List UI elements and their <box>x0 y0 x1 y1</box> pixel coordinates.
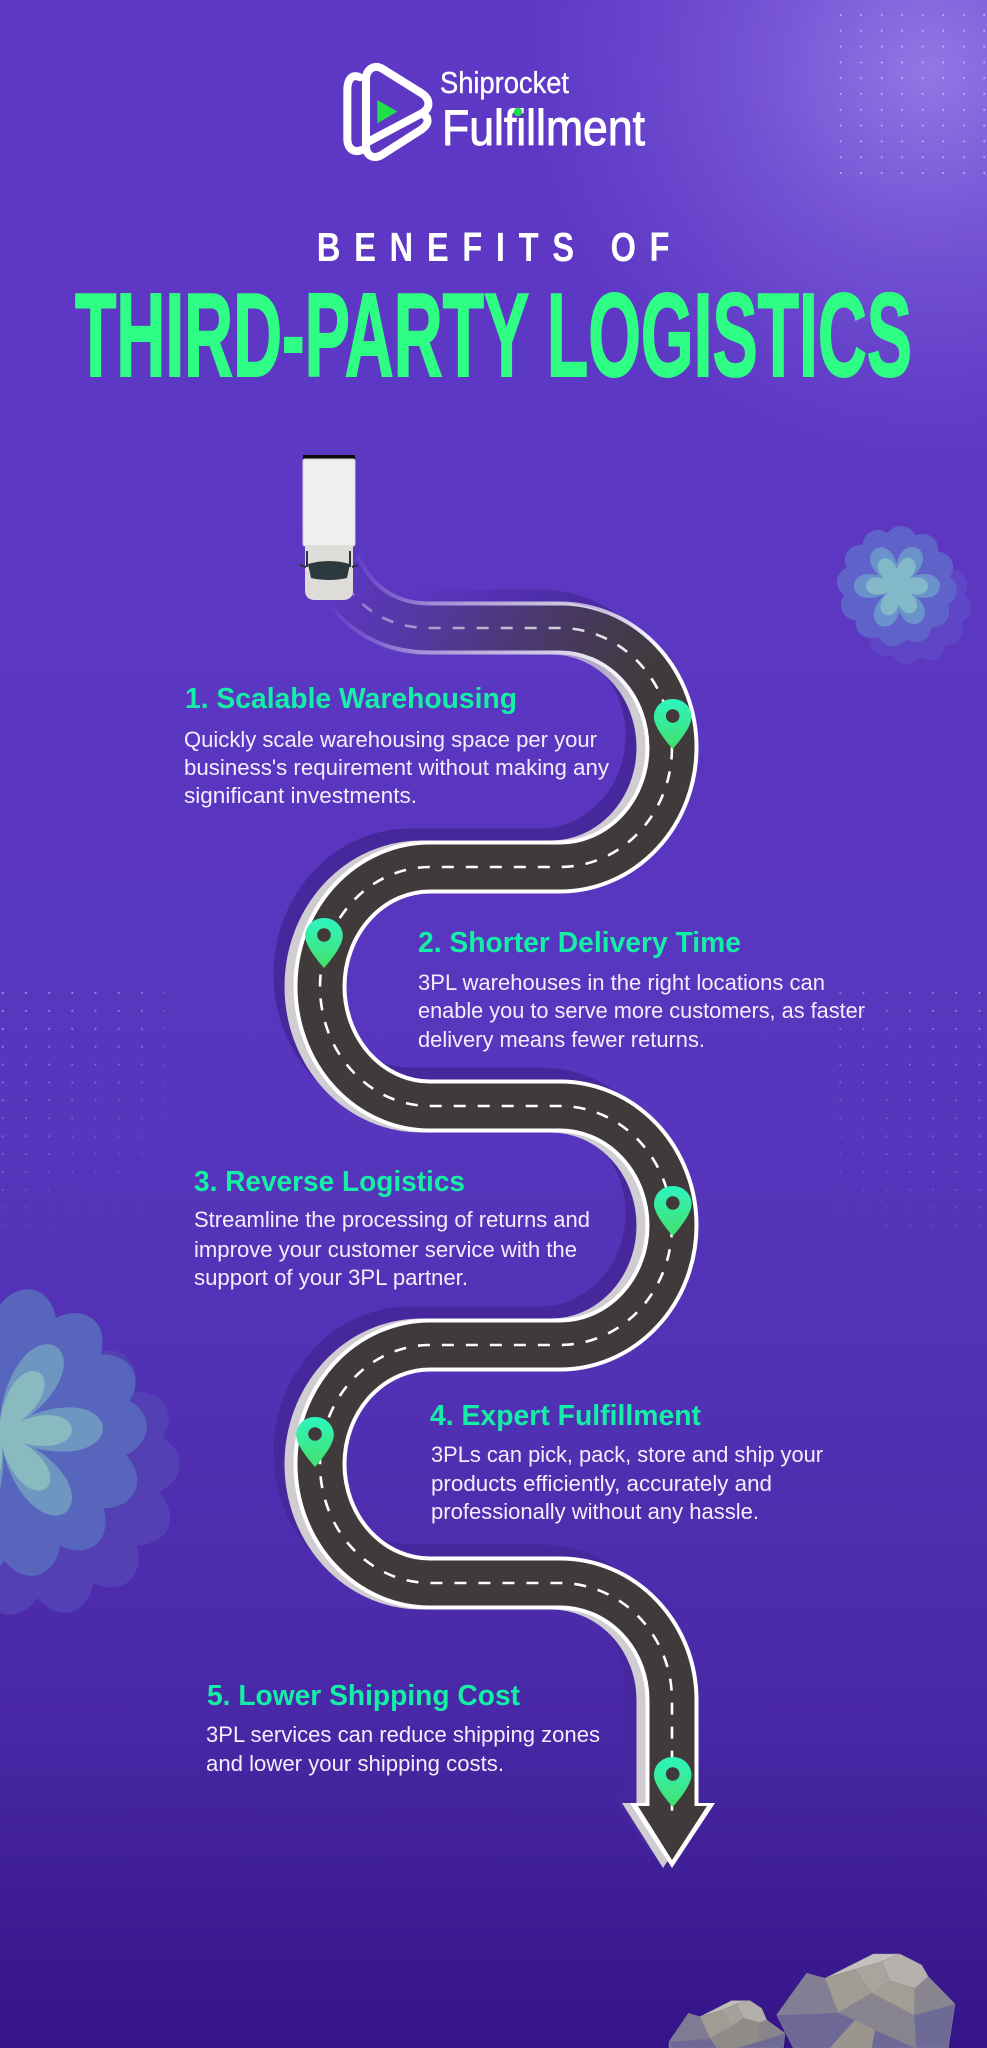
flower: left <box>0 1282 182 1621</box>
text block 2: 3PL warehouses in the right locations can <box>418 970 825 995</box>
text block 4: products efficiently, accurately and <box>431 1471 772 1496</box>
text block 2: 2. Shorter Delivery Time <box>418 927 741 959</box>
location pin 3 <box>654 1186 692 1236</box>
text block 3 <box>194 1166 590 1290</box>
location pin 4 <box>296 1417 334 1467</box>
title <box>75 223 912 402</box>
rock: small <box>669 2001 785 2048</box>
text block 4: 3PLs can pick, pack, store and ship your <box>431 1442 823 1467</box>
dot grid: left <box>0 990 165 1241</box>
road centre dashes <box>320 565 672 1815</box>
text block 4: 4. Expert Fulfillment <box>430 1400 701 1432</box>
location pin 1 <box>654 699 692 749</box>
text block 3: 3. Reverse Logistics <box>194 1166 465 1198</box>
road <box>300 553 715 1868</box>
truck <box>300 455 358 600</box>
text block 1 <box>184 683 610 808</box>
location pin 2 <box>305 918 343 968</box>
title line 1: BENEFITS OF <box>317 223 670 270</box>
rock: large <box>777 1954 955 2048</box>
logo wordmark: Shiprocket <box>440 65 569 100</box>
text block 1: Quickly scale warehousing space per your <box>184 727 597 752</box>
road shadow <box>300 553 695 1856</box>
location pin 5 <box>654 1757 692 1807</box>
text block 1: significant investments. <box>184 783 417 808</box>
text block 1: 1. Scalable Warehousing <box>185 683 517 715</box>
text block 5: and lower your shipping costs. <box>206 1751 504 1776</box>
rocks <box>669 1954 955 2048</box>
text block 2: enable you to serve more customers, as faster <box>418 998 865 1023</box>
road surface <box>320 565 707 1860</box>
logo wordmark: Fulfillment <box>442 100 645 156</box>
text block 3: Streamline the processing of returns and <box>194 1207 590 1232</box>
flower: top right <box>835 524 973 666</box>
text block 5: 5. Lower Shipping Cost <box>207 1680 520 1712</box>
text block 2 <box>418 927 865 1052</box>
road side wall <box>311 565 706 1868</box>
icon: play triangles <box>347 67 428 157</box>
dot grid: right <box>838 990 987 1230</box>
text block 4 <box>430 1400 823 1524</box>
logo <box>347 65 645 157</box>
text block 5 <box>206 1680 600 1776</box>
dot grid: top right <box>838 13 987 187</box>
text block 5: 3PL services can reduce shipping zones <box>206 1722 600 1747</box>
text block 3: improve your customer service with the <box>194 1237 577 1262</box>
text block 3: support of your 3PL partner. <box>194 1265 468 1290</box>
text block 2: delivery means fewer returns. <box>418 1027 705 1052</box>
logo wordmark <box>440 65 645 156</box>
text block 1: business's requirement without making any <box>184 755 610 780</box>
road edge lines <box>320 565 715 1868</box>
text block 4: professionally without any hassle. <box>431 1499 759 1524</box>
